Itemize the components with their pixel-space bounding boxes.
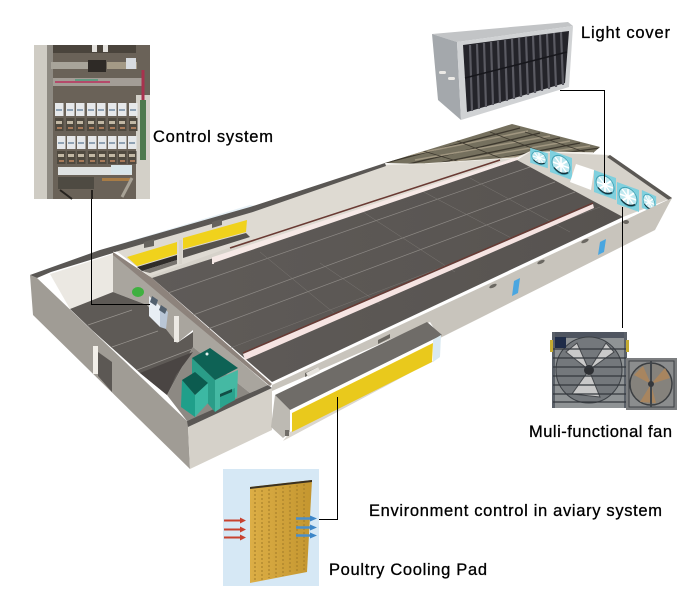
label: poultry cooling pad: Poultry Cooling Pad	[329, 561, 487, 579]
cooling pad housing	[271, 322, 442, 441]
title: environment control in aviary system: Environment control in aviary system	[369, 502, 662, 520]
long strip lights	[213, 158, 594, 360]
poultry house building	[30, 124, 672, 469]
boiler room floor	[167, 347, 268, 421]
side wall small details	[305, 220, 629, 377]
main floor	[152, 160, 623, 382]
roof section	[385, 124, 600, 166]
door	[93, 346, 98, 374]
label: multi-functional fan: Muli-functional fan	[529, 423, 672, 441]
front wall	[188, 388, 272, 469]
back wall	[115, 158, 517, 278]
partition wall	[113, 253, 268, 393]
green boiler units	[181, 348, 238, 417]
blue side wall inlets	[512, 239, 606, 296]
photo: light cover	[432, 22, 573, 120]
left room back area	[50, 254, 113, 309]
photo: multi-functional fans	[550, 332, 677, 410]
end wall with fans	[517, 148, 672, 217]
control box and devices on partition	[132, 287, 179, 342]
photo: control cabinet	[34, 45, 150, 199]
floor tile lines	[168, 167, 575, 330]
photo: poultry cooling pad	[223, 469, 319, 586]
connector lines	[92, 90, 622, 520]
left room floor	[70, 292, 193, 395]
label: light cover: Light cover	[581, 24, 670, 42]
side wall	[272, 198, 672, 391]
label: control system: Control system	[153, 128, 273, 146]
top rim of back wall	[100, 163, 386, 252]
yellow curtain windows	[127, 219, 250, 280]
outer left wall	[30, 275, 190, 469]
outside glow	[38, 205, 262, 276]
